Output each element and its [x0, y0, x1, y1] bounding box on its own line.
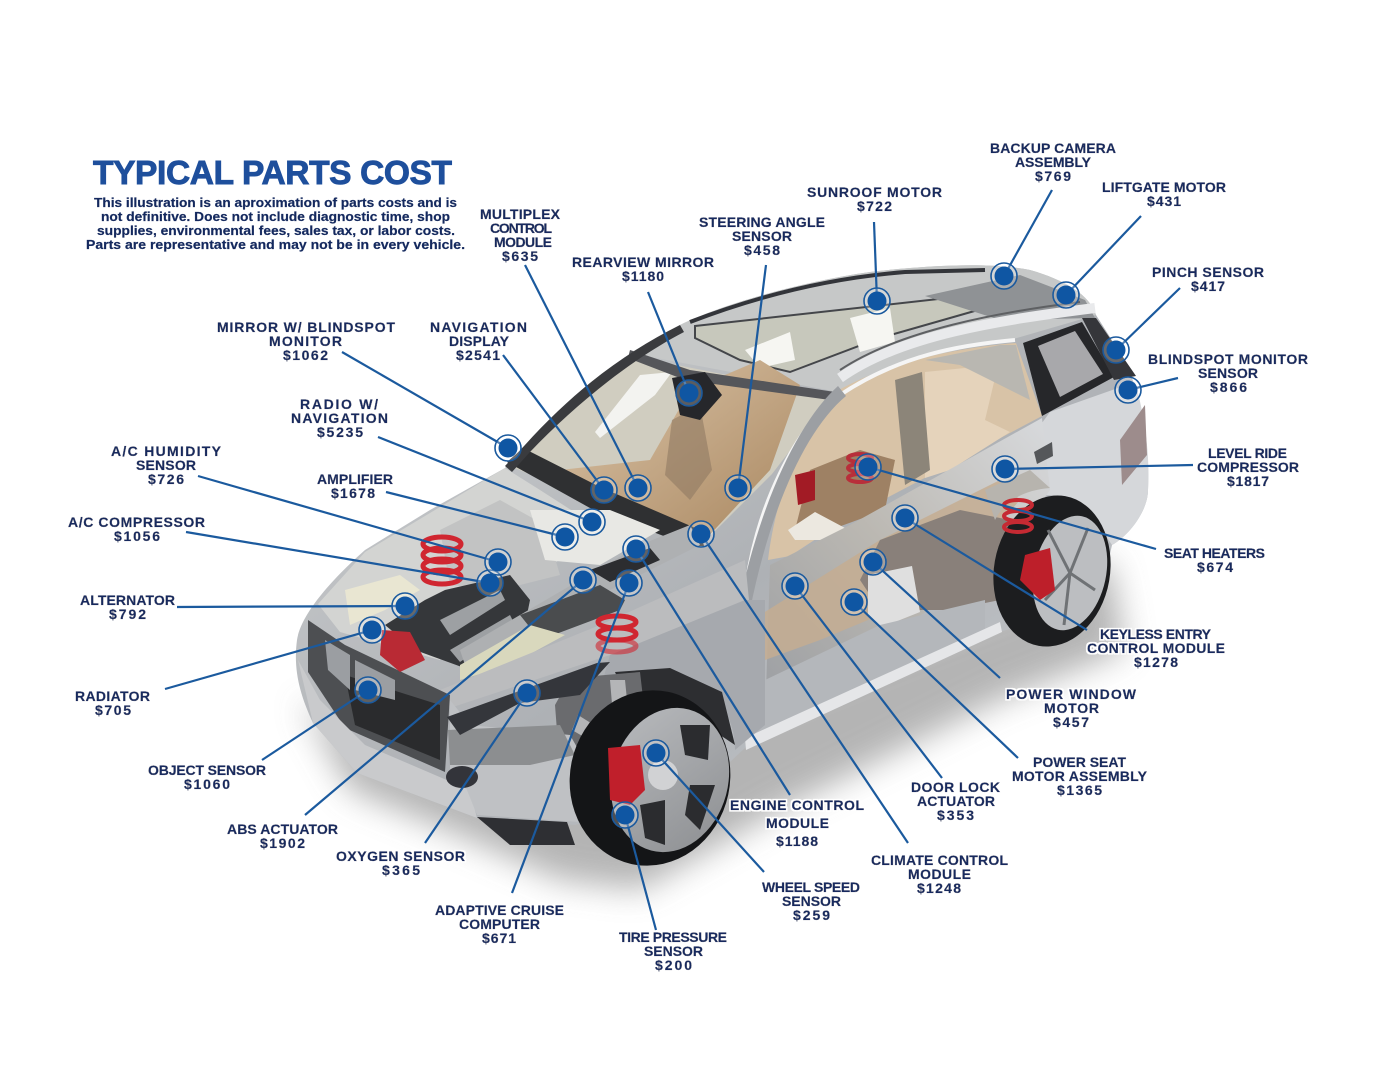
fuel tank [868, 566, 920, 628]
callout: a/c humidity sensor [111, 443, 511, 575]
rear quarter window frame [1023, 322, 1114, 416]
callout: wheel speed sensor: $259 [793, 907, 830, 923]
front bumper lower [298, 660, 477, 818]
callout: multiplex control module: CONTROL [490, 220, 552, 236]
seat back dark shade [665, 405, 712, 500]
callout: blindspot monitor sensor: $866 [1210, 379, 1247, 395]
yellow fluid area [460, 625, 565, 680]
callout: radiator: $705 [95, 702, 131, 718]
callout: power seat motor assembly: POWER SEAT [1033, 754, 1126, 770]
suspension chrome [572, 680, 630, 748]
rear roof spoiler [925, 275, 1095, 320]
upper belt rail [840, 308, 1095, 378]
callout: climate control module: MODULE [908, 866, 971, 882]
radiator bright fins [325, 640, 395, 700]
callout: radio with navigation: NAVIGATION [291, 410, 388, 426]
callout: tire pressure sensor: TIRE PRESSURE [619, 929, 727, 945]
rear tire [982, 486, 1122, 656]
callout: navigation display: $2541 [456, 347, 500, 363]
callout: backup camera assembly: ASSEMBLY [1015, 154, 1092, 170]
left caliper [380, 630, 425, 672]
callout: alternator: ALTERNATOR [80, 592, 175, 608]
callout: seat heaters: SEAT HEATERS [1164, 545, 1265, 561]
callout: wheel speed sensor [643, 740, 860, 923]
door handle [1034, 442, 1053, 464]
callout: radio with navigation: $5235 [317, 424, 363, 440]
callout: power seat motor assembly: MOTOR ASSEMBLY [1012, 768, 1148, 784]
engine bay [385, 575, 530, 670]
callout: engine control module: $1188 [776, 833, 818, 849]
front seat and engine see-through [795, 450, 895, 530]
wheel arch dark [615, 668, 735, 745]
roof rail highlight [745, 340, 1015, 600]
suspension and engine [555, 672, 645, 800]
callout: oxygen sensor: OXYGEN SENSOR [336, 848, 465, 864]
callout: alternator: $792 [109, 606, 146, 622]
callout: steering angle sensor: STEERING ANGLE [699, 214, 825, 230]
grille mesh [345, 675, 440, 760]
rear rim [1023, 509, 1117, 637]
windshield [510, 356, 832, 546]
callout: amplifier: AMPLIFIER [317, 471, 393, 487]
rear pillar dark [1082, 318, 1136, 380]
callout: a/c compressor: A/C COMPRESSOR [68, 514, 205, 530]
callout: amplifier: $1678 [331, 485, 375, 501]
callout: mirror with blindspot monitor: MIRROR W/ BLINDSPOT [217, 319, 395, 335]
callout: climate control module: CLIMATE CONTROL [871, 852, 1008, 868]
front rim gaps [640, 725, 715, 845]
interior brake [795, 470, 815, 505]
callout: multiplex control module [480, 206, 651, 501]
callout: a/c compressor: $1056 [114, 528, 160, 544]
front wing side [600, 600, 765, 750]
callout: backup camera assembly [990, 140, 1116, 289]
callout: mirror with blindspot monitor [217, 319, 521, 461]
callout: keyless entry control module: CONTROL MODULE [1087, 640, 1225, 656]
callout: mirror with blindspot monitor: $1062 [283, 347, 328, 363]
engine bay right dark [520, 585, 625, 640]
callout: level ride compressor: $1817 [1227, 473, 1269, 489]
callout: abs actuator [227, 567, 596, 851]
callout: a/c compressor [68, 514, 503, 596]
callout: pinch sensor: PINCH SENSOR [1152, 264, 1264, 280]
callout: liftgate motor: $431 [1147, 193, 1181, 209]
callout: radiator [75, 617, 385, 718]
callout: sunroof motor: $722 [857, 198, 892, 214]
rear seat upper glass [925, 345, 1030, 400]
coolant cream area [345, 575, 420, 625]
callout: level ride compressor: LEVEL RIDE [1208, 445, 1287, 461]
grille area [308, 620, 450, 772]
callout: amplifier [317, 471, 578, 550]
callout: climate control module: $1248 [917, 880, 961, 896]
callout: blindspot monitor sensor: BLINDSPOT MONITOR [1148, 351, 1308, 367]
B-pillar [895, 372, 930, 485]
callout: power seat motor assembly [841, 589, 1148, 798]
front bumper right [450, 700, 590, 822]
callout: door lock actuator: $353 [937, 807, 974, 823]
callout: radio with navigation [291, 396, 605, 535]
callout: navigation display: DISPLAY [449, 333, 510, 349]
callout: oxygen sensor [336, 680, 540, 878]
callout: blindspot monitor sensor [1115, 351, 1308, 403]
callout: backup camera assembly: BACKUP CAMERA [990, 140, 1116, 156]
disclaimer text block: This illustration is an aproximation of parts costs and is [94, 196, 457, 210]
callout: power window motor [860, 549, 1137, 730]
callout: object sensor [148, 677, 381, 792]
ground shadow [300, 560, 1125, 890]
windshield bright patch [595, 372, 672, 438]
callout: rearview mirror: REARVIEW MIRROR [572, 254, 714, 270]
rocker panel highlight [745, 622, 1002, 750]
callout: keyless entry control module: KEYLESS ENTRY [1100, 626, 1212, 642]
callout: tire pressure sensor: $200 [655, 957, 692, 973]
callout: rearview mirror: $1180 [622, 268, 664, 284]
fender lower tube [440, 560, 750, 708]
callout: adaptive cruise computer: COMPUTER [459, 916, 540, 932]
headlight [447, 662, 610, 735]
rear underbody components [860, 510, 1010, 610]
door beige see-through [760, 480, 1020, 660]
exterior side mirror [788, 512, 845, 540]
windshield header [628, 350, 835, 400]
hood inner pale area [440, 500, 560, 590]
callout: door lock actuator: ACTUATOR [917, 793, 995, 809]
callout: oxygen sensor: $365 [382, 862, 420, 878]
A-pillar right [738, 386, 846, 610]
callout: door lock actuator [782, 573, 1000, 823]
callout: sunroof motor: SUNROOF MOTOR [807, 184, 942, 200]
front seat spring [848, 454, 872, 482]
left front spring [423, 537, 461, 584]
disclaimer text block: not definitive. Does not include diagnostic time, shop [101, 210, 450, 224]
callout: navigation display: NAVIGATION [430, 319, 527, 335]
callout: power seat motor assembly: $1365 [1057, 782, 1102, 798]
rear rim spokes [1045, 528, 1095, 625]
A-pillar left [505, 325, 684, 472]
cowl vent [590, 548, 660, 582]
callout: radiator: RADIATOR [75, 688, 150, 704]
callout: seat heaters [855, 454, 1265, 575]
rear caliper [1020, 548, 1055, 600]
callout: adaptive cruise computer: $671 [482, 930, 516, 946]
callout: level ride compressor: COMPRESSOR [1197, 459, 1299, 475]
door panel [765, 418, 1050, 725]
callout: engine control module [623, 536, 864, 849]
callout: wheel speed sensor: SENSOR [782, 893, 841, 909]
disclaimer text block: supplies, environmental fees, sales tax, or labor costs. [97, 224, 455, 238]
callout: climate control module [688, 521, 1008, 896]
disclaimer text block [86, 196, 465, 252]
callout: object sensor: OBJECT SENSOR [148, 762, 266, 778]
hood [318, 468, 610, 660]
callout: adaptive cruise computer [435, 570, 642, 946]
callout: liftgate motor: LIFTGATE MOTOR [1102, 179, 1226, 195]
callout: rearview mirror [572, 254, 714, 406]
callout: keyless entry control module: $1278 [1134, 654, 1178, 670]
callout: keyless entry control module [892, 505, 1225, 670]
callout: tire pressure sensor [612, 802, 727, 973]
callout: object sensor: $1060 [184, 776, 230, 792]
callout: abs actuator: $1902 [260, 835, 305, 851]
illustration: car cutaway [296, 265, 1148, 881]
callout: pinch sensor: $417 [1191, 278, 1225, 294]
callout: wheel speed sensor: WHEEL SPEED [762, 879, 860, 895]
right fender upper tube [460, 525, 700, 680]
front rim [595, 694, 745, 866]
front hub [648, 760, 678, 790]
side window opening [768, 343, 1042, 560]
callout: steering angle sensor [699, 214, 825, 501]
callout: multiplex control module: MULTIPLEX [480, 206, 561, 222]
callout: power window motor: MOTOR [1044, 700, 1099, 716]
callout: radio with navigation: RADIO W/ [300, 396, 378, 412]
callout: multiplex control module: $635 [502, 248, 538, 264]
callout: alternator [80, 592, 418, 622]
lower door panel [745, 600, 985, 748]
callout: steering angle sensor: $458 [744, 242, 780, 258]
dashboard and seat [560, 360, 800, 540]
callout: level ride compressor [992, 445, 1299, 489]
callout: mirror with blindspot monitor: MONITOR [269, 333, 342, 349]
callout: seat heaters: $674 [1197, 559, 1233, 575]
callout: backup camera assembly: $769 [1035, 168, 1071, 184]
roof rail [690, 270, 985, 322]
right front spring [598, 616, 636, 652]
rearview mirror [672, 372, 722, 420]
callout: a/c humidity sensor: SENSOR [136, 457, 196, 473]
callout: a/c humidity sensor: A/C HUMIDITY [111, 443, 222, 459]
tail light [1120, 405, 1147, 485]
firewall bright area [530, 510, 660, 565]
callout: power window motor: $457 [1053, 714, 1089, 730]
front tire [553, 675, 747, 881]
rear fender over tire [985, 470, 1050, 520]
rear quarter panel [1000, 382, 1148, 545]
callout: tire pressure sensor: SENSOR [644, 943, 703, 959]
callout: liftgate motor [1053, 179, 1226, 308]
callout: adaptive cruise computer: ADAPTIVE CRUISE [435, 902, 564, 918]
callout: engine control module: ENGINE CONTROL [730, 797, 864, 813]
callout: a/c humidity sensor: $726 [148, 471, 184, 487]
sunroof glass [695, 296, 985, 372]
rear seat [925, 368, 1010, 478]
disclaimer text block: Parts are representative and may not be in every vehicle. [86, 238, 465, 252]
fog lamp [446, 766, 478, 788]
callout: navigation display [430, 319, 617, 503]
callout: abs actuator: ABS ACTUATOR [227, 821, 338, 837]
rear quarter glass [1038, 331, 1103, 397]
engine highlights [440, 590, 515, 662]
callout: engine control module: MODULE [766, 815, 829, 831]
bumper valance [477, 817, 575, 845]
callout: power window motor: POWER WINDOW [1006, 686, 1137, 702]
cowl [507, 448, 704, 546]
title: TYPICAL PARTS COST [93, 155, 453, 192]
car body silhouette [296, 265, 1148, 825]
front caliper [608, 745, 645, 805]
callout: multiplex control module: MODULE [494, 234, 552, 250]
sunroof highlights [745, 308, 895, 368]
rear spring [1004, 500, 1032, 532]
callout: door lock actuator: DOOR LOCK [911, 779, 1000, 795]
callout: steering angle sensor: SENSOR [732, 228, 792, 244]
callout: blindspot monitor sensor: SENSOR [1198, 365, 1258, 381]
front engine chrome [448, 725, 575, 765]
upper dark line [840, 302, 1080, 370]
roof panel [630, 265, 1096, 392]
callout: pinch sensor [1103, 264, 1264, 363]
callout: sunroof motor [807, 184, 942, 314]
